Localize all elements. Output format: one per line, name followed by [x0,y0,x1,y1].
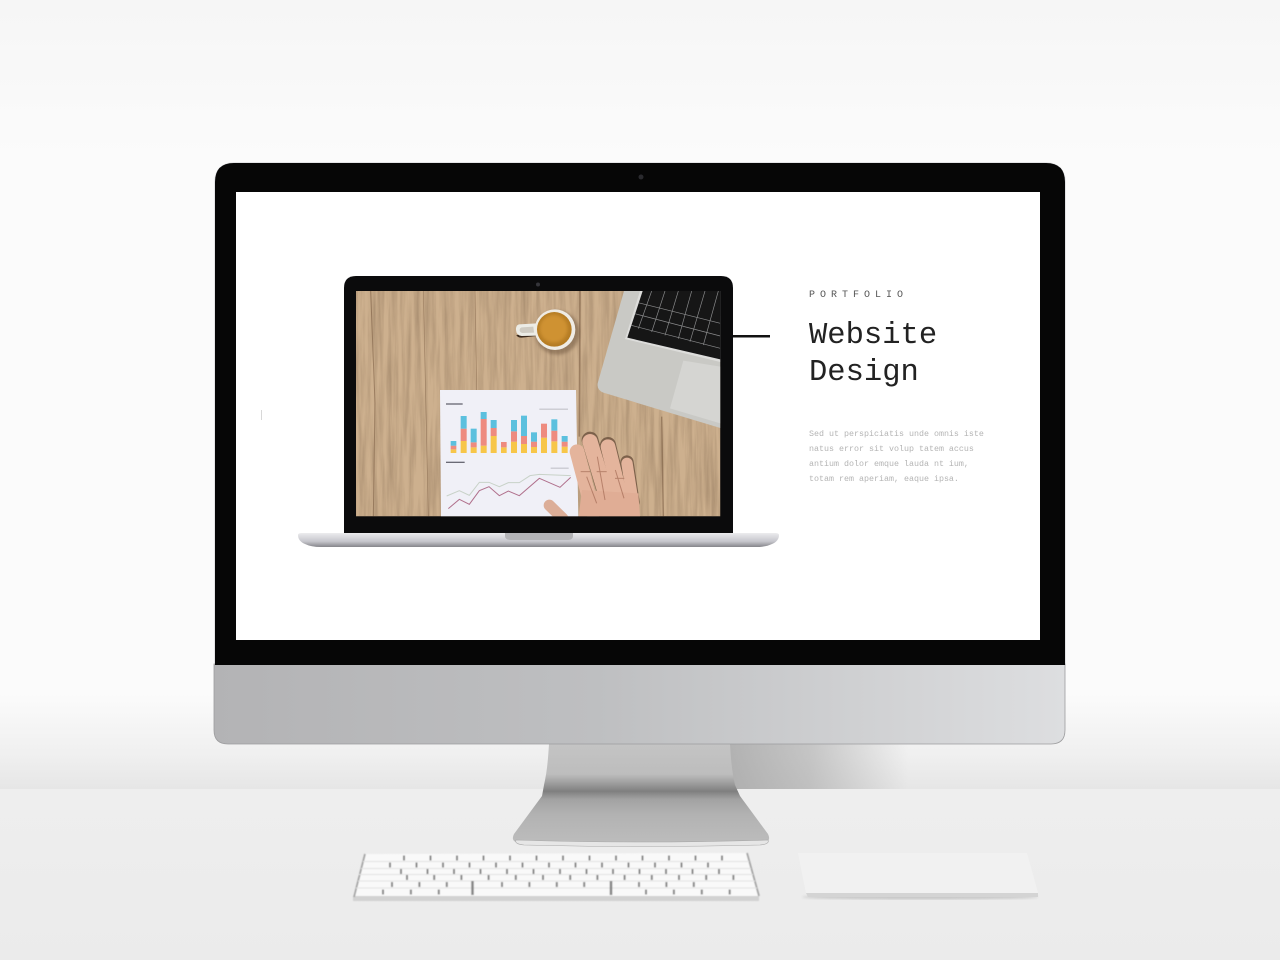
line chart [447,474,571,509]
trackpad [798,853,1038,900]
laptop base [298,533,779,547]
paper with charts [440,390,578,516]
chart headings [446,403,569,469]
title: Website [809,319,937,353]
stand shadow on wall [728,744,908,789]
coffee cup [516,309,579,355]
photographed laptop [598,291,720,428]
bar chart [451,412,568,453]
monitor stand [513,744,769,844]
description: natus error sit volup tatem accus [809,444,974,454]
laptop [298,276,779,547]
laptop lid [344,276,733,533]
small side mark [261,410,262,420]
description: totam rem aperiam, eaque ipsa. [809,474,959,484]
keyboard [353,853,759,901]
eyebrow label: PORTFOLIO [809,290,908,301]
webcam [638,174,644,180]
text block: portfolio [809,290,984,484]
hand [549,440,640,518]
description: Sed ut perspiciatis unde omnis iste [809,429,984,439]
laptop camera [536,282,540,286]
laptop notch [505,533,573,540]
monitor screen [236,192,1040,640]
description: antium dolor emque lauda nt ium, [809,459,969,469]
desk surface [0,789,1280,960]
monitor [214,162,1066,744]
wood desk [356,291,720,516]
laptop screen photo [356,291,720,518]
stand base highlight [516,840,768,846]
monitor bezel [215,163,1065,665]
title: Design [809,356,919,390]
monitor chin [214,664,1065,744]
monitor rim [214,162,1066,665]
connector line [733,335,770,338]
